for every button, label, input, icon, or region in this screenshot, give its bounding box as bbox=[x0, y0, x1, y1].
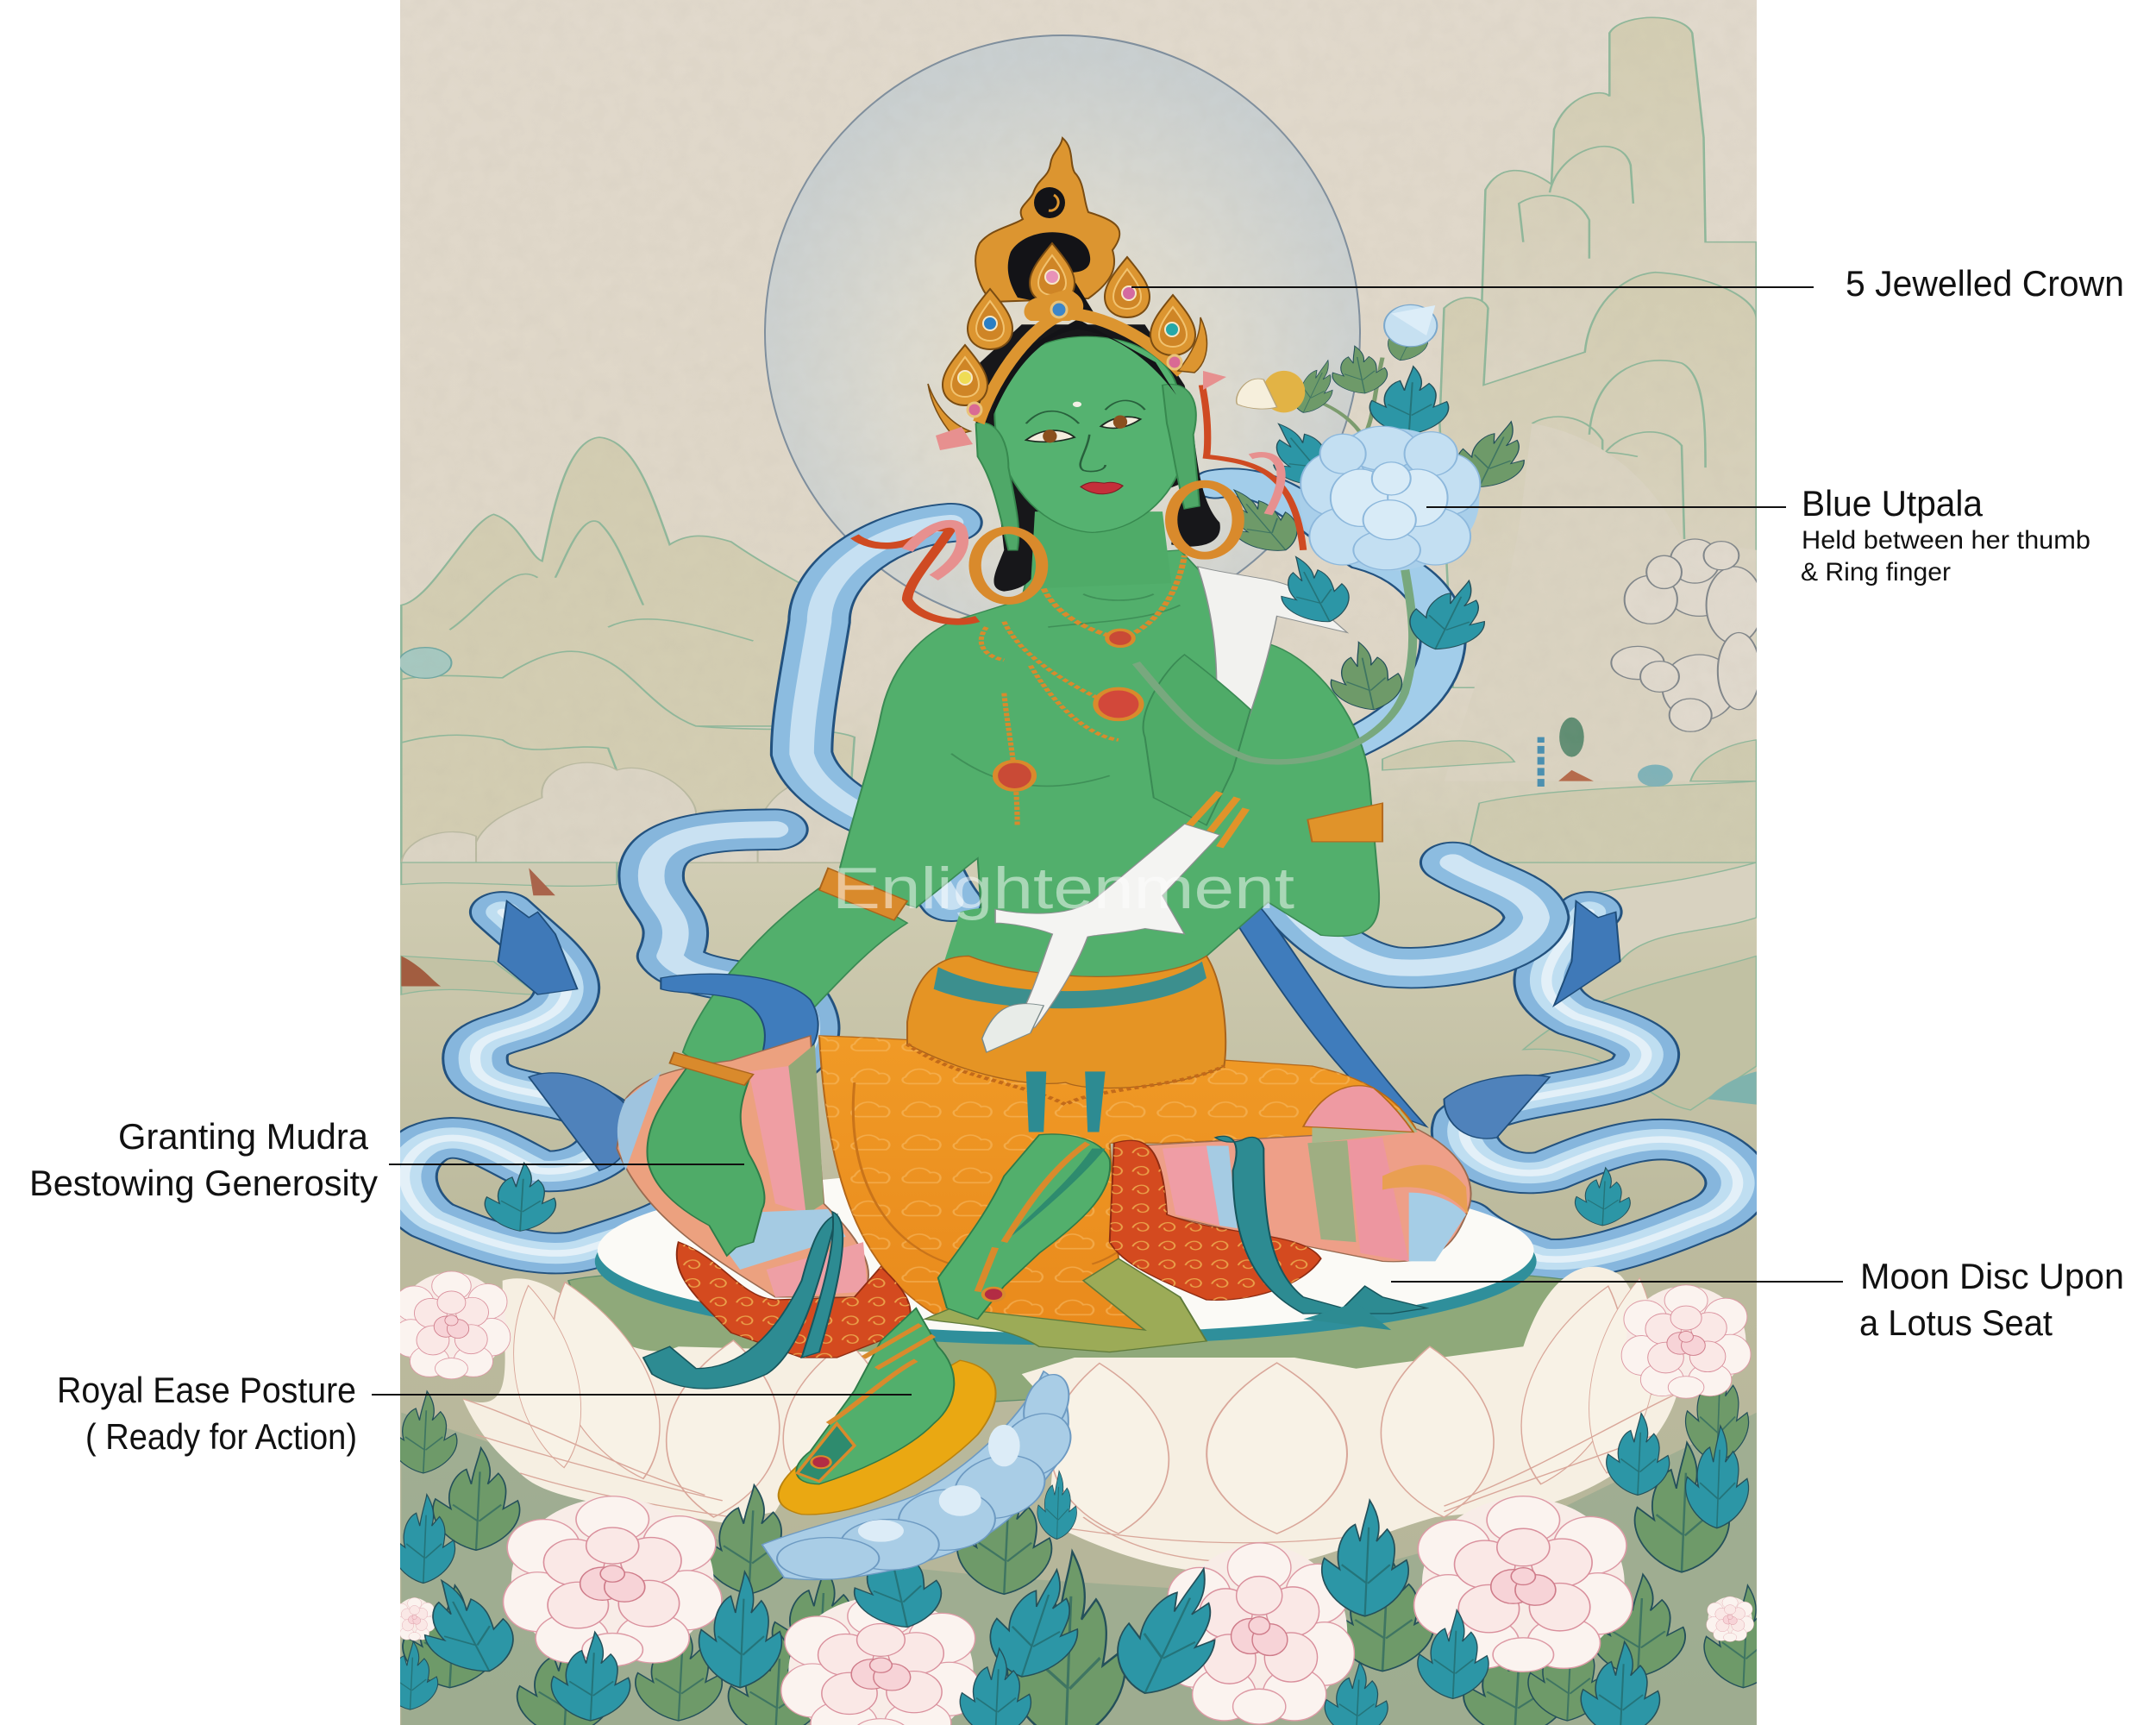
pendant leg bbox=[796, 1308, 954, 1484]
torso of Green Tara bbox=[837, 550, 1382, 990]
blue utpala flower with stem bbox=[1136, 304, 1540, 762]
right distant mountains bbox=[1438, 17, 1757, 688]
peonies bbox=[392, 1271, 1754, 1725]
left lower ribbon bbox=[404, 912, 679, 1253]
paper texture bbox=[400, 0, 1757, 862]
halo disc bbox=[765, 35, 1360, 630]
teal pendants bbox=[1026, 1071, 1106, 1132]
ribbon ends bbox=[498, 901, 577, 994]
eyes, urna, lips bbox=[1026, 400, 1145, 494]
callout: Granting Mudra bbox=[29, 1116, 744, 1203]
callout: Blue Utpala: & Ring finger bbox=[1801, 558, 1951, 586]
right striped sleeve bbox=[1136, 1110, 1471, 1262]
hair knot bbox=[1008, 232, 1094, 312]
teal leaves bbox=[383, 1163, 1749, 1725]
callout: Royal Ease Posture bbox=[57, 1370, 912, 1457]
jewelled lobes bbox=[1030, 243, 1075, 304]
right grey clouds bbox=[1611, 539, 1763, 731]
earrings bbox=[975, 530, 1042, 600]
watermark: Enlightenment bbox=[832, 856, 1294, 921]
long blue scarf strip right bbox=[1233, 885, 1426, 1126]
left beige clouds bbox=[401, 762, 855, 862]
teal sash right bbox=[1215, 1136, 1426, 1314]
callout: Granting Mudra: Bestowing Generosity bbox=[29, 1163, 378, 1203]
lower body bbox=[617, 824, 1471, 1580]
crown bbox=[928, 138, 1226, 450]
main blue flower bbox=[1300, 426, 1480, 571]
callout: Moon Disc Upon a Lotus Seat: Moon Disc Upon bbox=[1860, 1256, 2124, 1296]
belt jewelry bbox=[907, 956, 1225, 1088]
hair beneath diadem bbox=[992, 319, 1176, 419]
crown jewels bbox=[1045, 270, 1059, 284]
ears bbox=[976, 423, 1018, 550]
necklace short bbox=[1044, 555, 1184, 638]
moon disc bbox=[595, 1168, 1537, 1345]
callout: Blue Utpala: Held between her thumb bbox=[1802, 526, 2090, 555]
painting background bbox=[400, 0, 1757, 1725]
face bbox=[994, 336, 1186, 532]
white shoulder cloth bbox=[1198, 567, 1347, 781]
orange lap bbox=[819, 1036, 1418, 1330]
golden foot cushion bbox=[779, 1360, 996, 1515]
lower landscape patches bbox=[401, 862, 1757, 1110]
callout: Royal Ease Posture: ( Ready for Action) bbox=[85, 1416, 357, 1457]
stem bbox=[1136, 567, 1413, 762]
tiny trees and rocks bbox=[1541, 718, 1673, 787]
upper scarf loops bbox=[651, 830, 1537, 1126]
right sleeve upper cuffs bbox=[1303, 1086, 1413, 1132]
callout: Royal Ease Posture: Royal Ease Posture bbox=[57, 1370, 356, 1410]
white lotus right bbox=[1022, 1267, 1677, 1572]
waist belt and bare belly bbox=[934, 904, 1206, 994]
left striped sleeve bbox=[617, 1036, 868, 1297]
callout: Blue Utpala bbox=[1426, 483, 2090, 586]
painting bbox=[383, 0, 1783, 1725]
teal sash left bbox=[643, 1214, 837, 1389]
red hair ribbons bbox=[855, 528, 978, 622]
white sash bbox=[995, 824, 1219, 1027]
raised hand bbox=[1144, 655, 1250, 825]
yellow flower bbox=[1237, 371, 1305, 412]
left hand bbox=[647, 1061, 764, 1256]
callout: Blue Utpala: Blue Utpala bbox=[1802, 483, 1984, 524]
callout: Granting Mudra: Granting Mudra bbox=[118, 1116, 369, 1157]
white lotus left bbox=[463, 1276, 900, 1522]
blue lotus under foot bbox=[762, 1371, 1083, 1580]
right armlet and bracelets bbox=[1307, 803, 1382, 842]
landscape: mountains and clouds bbox=[398, 17, 1763, 862]
left hills bbox=[401, 437, 855, 862]
red brocade right bbox=[1110, 1140, 1321, 1300]
flower leaves bbox=[1244, 367, 1501, 656]
garden base foliage bbox=[401, 1413, 1757, 1725]
right lower ribbon bbox=[1462, 912, 1738, 1259]
background ribbons, lotus seat and flowers bbox=[383, 862, 1783, 1725]
right ground bbox=[1382, 740, 1757, 862]
bent right leg and foot bbox=[938, 1134, 1110, 1319]
sleeve scarf crossing arm bbox=[661, 974, 818, 1077]
red brocade left bbox=[677, 1242, 911, 1358]
green lotus base bbox=[568, 1264, 1571, 1402]
orange lap hem bbox=[924, 1258, 1206, 1352]
armlet left bbox=[819, 868, 907, 920]
scarf behind the torso bbox=[802, 483, 1443, 902]
small blue mound bbox=[398, 648, 451, 678]
leaves lower garden bbox=[390, 1360, 1783, 1725]
left arm bbox=[683, 879, 907, 1082]
callout: Moon Disc Upon a Lotus Seat: a Lotus Seat bbox=[1859, 1302, 2053, 1343]
bud bbox=[1384, 304, 1437, 347]
crown crest with top knot bbox=[975, 138, 1119, 302]
necklace long bbox=[981, 622, 1119, 825]
head of Green Tara bbox=[855, 324, 1303, 622]
pink crown ties bbox=[936, 371, 1226, 450]
neck bbox=[1031, 511, 1171, 588]
hair bbox=[974, 324, 1220, 592]
callout: Moon Disc Upon a Lotus Seat bbox=[1391, 1256, 2124, 1343]
callout: 5 Jewelled Crown: 5 Jewelled Crown bbox=[1846, 263, 2124, 304]
